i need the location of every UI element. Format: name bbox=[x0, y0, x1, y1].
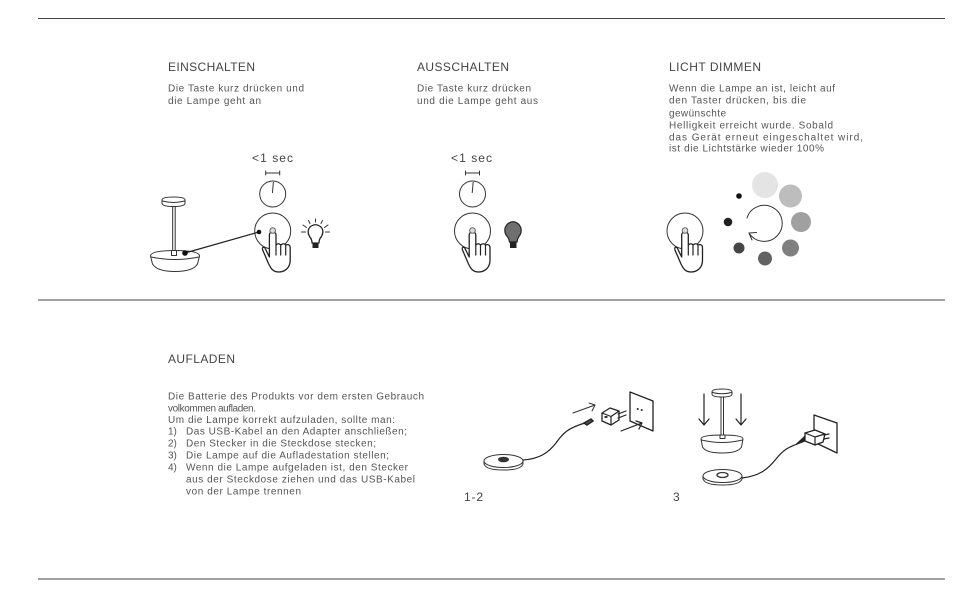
text block: charging instructions: aus der Steckdose ziehen und das USB-Kabel bbox=[186, 474, 415, 486]
panel: licht dimmen bbox=[667, 60, 863, 272]
timer label: <1 sec bbox=[451, 151, 492, 165]
text block: einschalten: Die Taste kurz drücken und bbox=[168, 84, 304, 94]
heading: ausschalten: AUSSCHALTEN bbox=[417, 60, 509, 74]
usb cable bbox=[523, 423, 585, 460]
connector line from lamp to button bbox=[182, 230, 261, 256]
icon: lamp bbox=[150, 197, 200, 272]
panel: einschalten bbox=[150, 60, 330, 272]
icon: hand pressing button bbox=[667, 213, 703, 272]
wall socket bbox=[630, 392, 653, 431]
charging base bbox=[484, 454, 523, 470]
text block: einschalten bbox=[168, 84, 304, 107]
icon: light bulb on bbox=[302, 219, 330, 248]
heading: einschalten: EINSCHALTEN bbox=[168, 60, 255, 74]
icon: hand pressing button bbox=[255, 213, 291, 272]
text block: licht dimmen: Wenn die Lampe an ist, leicht auf bbox=[669, 84, 835, 94]
wall socket bbox=[814, 415, 837, 453]
icon: timer clock bbox=[260, 171, 286, 207]
text block: licht dimmen: gewünschte bbox=[669, 108, 726, 120]
text block: charging instructions: von der Lampe trennen bbox=[186, 486, 301, 498]
arrow to adapter bbox=[573, 403, 595, 413]
icon: hand pressing button bbox=[454, 213, 490, 272]
icon: light bulb off bbox=[505, 222, 521, 248]
text block: licht dimmen: das Gerät erneut eingeschaltet wird, bbox=[669, 132, 863, 144]
text block: einschalten: die Lampe geht an bbox=[168, 96, 261, 107]
text block: licht dimmen: ist die Lichtstärke wieder 100% bbox=[669, 144, 824, 154]
step label 3: 3 bbox=[673, 490, 680, 504]
charging base bbox=[703, 470, 742, 485]
text block: ausschalten: Die Taste kurz drücken bbox=[417, 84, 531, 94]
illustration: steps 1-2 bbox=[464, 392, 653, 504]
text block: charging instructions: Die Batterie des Produkts vor dem ersten Gebrauch bbox=[168, 392, 424, 402]
text block: charging instructions: volkommen aufladen. bbox=[168, 404, 256, 414]
text block: charging instructions bbox=[168, 392, 424, 498]
text block: ausschalten bbox=[417, 84, 538, 107]
step label 1-2: 1-2 bbox=[464, 490, 483, 504]
icon: rotation arrow bbox=[747, 205, 782, 241]
text block: charging instructions: 1) bbox=[168, 426, 177, 438]
timer label: <1 sec bbox=[252, 151, 293, 165]
icon: timer clock bbox=[460, 171, 486, 207]
text block: charging instructions: 3) bbox=[168, 450, 177, 462]
panel: ausschalten bbox=[417, 60, 538, 272]
text block: charging instructions: Die Lampe auf die Aufladestation stellen; bbox=[186, 450, 389, 462]
usb connector bbox=[584, 419, 593, 425]
illustration: step 3 bbox=[673, 389, 837, 504]
brightness dots bbox=[724, 172, 811, 266]
text block: licht dimmen: den Taster drücken, bis die bbox=[669, 96, 806, 106]
top divider bbox=[38, 18, 945, 20]
plug bbox=[796, 430, 829, 445]
text block: licht dimmen: Helligkeit erreicht wurde. Sobald bbox=[669, 120, 833, 132]
text block: licht dimmen bbox=[669, 84, 863, 154]
panel: aufladen bbox=[168, 352, 837, 504]
text block: charging instructions: 2) bbox=[168, 438, 177, 450]
text block: charging instructions: Das USB-Kabel an den Adapter anschließen; bbox=[186, 426, 407, 438]
heading: licht dimmen: LICHT DIMMEN bbox=[669, 60, 761, 74]
power cable bbox=[742, 444, 797, 478]
text block: charging instructions: Wenn die Lampe aufgeladen ist, den Stecker bbox=[186, 462, 409, 474]
text block: charging instructions: 4) bbox=[168, 462, 177, 474]
lamp bbox=[701, 389, 743, 453]
heading: aufladen: AUFLADEN bbox=[168, 352, 235, 366]
usb adapter bbox=[602, 408, 626, 425]
arrow to socket bbox=[621, 421, 642, 431]
middle divider bbox=[38, 299, 945, 301]
text block: ausschalten: und die Lampe geht aus bbox=[417, 96, 538, 107]
down arrows bbox=[699, 394, 746, 425]
bottom divider bbox=[38, 578, 945, 580]
text block: charging instructions: Um die Lampe korrekt aufzuladen, sollte man: bbox=[168, 415, 395, 426]
text block: charging instructions: Den Stecker in die Steckdose stecken; bbox=[186, 438, 376, 450]
